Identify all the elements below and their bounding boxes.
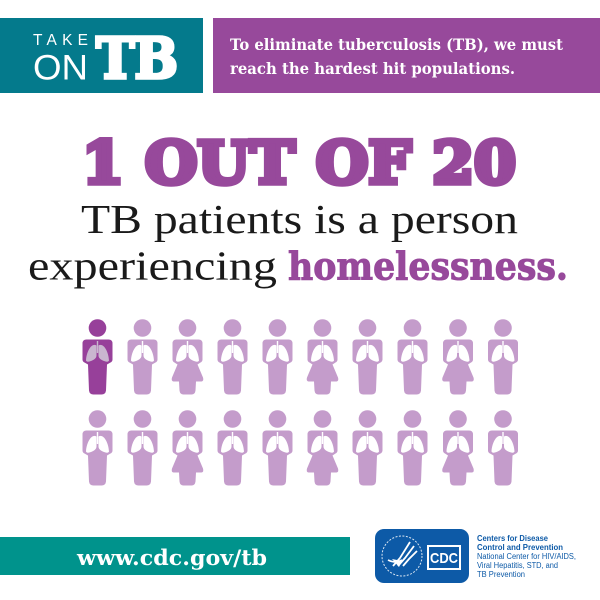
panel: purple message banner xyxy=(213,18,600,93)
footer bar: website xyxy=(0,537,350,575)
text: agency name: Control and Prevention xyxy=(477,543,563,552)
person: highlighted xyxy=(82,319,112,394)
subheading line: TB patients is a person: TB patients is a person xyxy=(81,196,518,242)
text: agency name: Centers for Disease xyxy=(477,534,549,543)
headline: 1 out of 20: 1 OUT OF 20 xyxy=(82,129,516,197)
text: agency name: TB Prevention xyxy=(477,570,525,579)
banner text: reach the hardest hit populations. xyxy=(230,59,515,78)
subheading line: experiencing homelessness: experiencing xyxy=(28,242,277,288)
text: agency name xyxy=(477,534,576,579)
logo text: ON: ON xyxy=(33,48,88,88)
icon: HHS seal xyxy=(382,536,422,576)
pictogram row 1 xyxy=(128,319,518,394)
banner text: To eliminate tuberculosis (TB), we must xyxy=(230,35,564,54)
banner text xyxy=(230,35,564,78)
logo text: TB: TB xyxy=(96,26,178,92)
pictogram row 2 xyxy=(82,410,518,486)
text: agency name: National Center for HIV/AIDS, xyxy=(477,552,576,561)
text: agency name: Viral Hepatitis, STD, and xyxy=(477,561,558,570)
logo: CDC badge xyxy=(375,529,469,583)
logo text: TAKE: TAKE xyxy=(33,32,88,49)
panel: Take on TB logo banner xyxy=(0,18,203,93)
CDC mark: CDC xyxy=(430,550,458,567)
pictogram: 20 people with lungs, 1 highlighted xyxy=(82,319,518,486)
website url: www.cdc.gov/tb xyxy=(76,545,267,570)
emphasized word: homelessness: homelessness. xyxy=(288,244,568,288)
subheading line: experiencing homelessness xyxy=(28,242,568,288)
